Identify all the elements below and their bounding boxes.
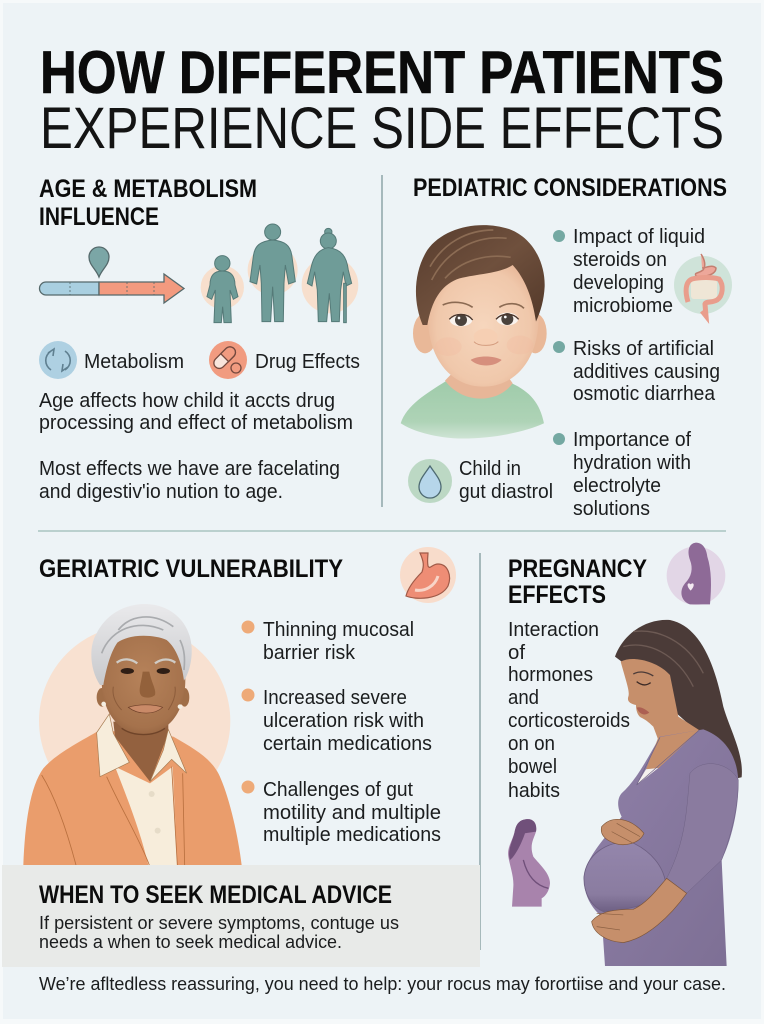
- text block: interaction of hormones: bowel: [508, 756, 557, 778]
- text block: interaction of hormones: corticosteroids: [508, 710, 630, 732]
- bullet list: pediatric: developing: [573, 272, 664, 294]
- icon: water drop: [408, 459, 452, 503]
- icon: metabolism cycle: [39, 341, 77, 379]
- bullet list: pediatric: hydration with: [573, 452, 691, 474]
- label: child in gut diastrol: gut diastrol: [459, 481, 553, 503]
- heading: pregnancy effects: EFFECTS: [508, 581, 606, 609]
- heading: age and metabolism: INFLUENCE: [39, 203, 159, 231]
- bullet list: geriatric: [242, 619, 441, 846]
- bullet list: pediatric: solutions: [573, 498, 650, 520]
- panel: geriatric vulnerability: [23, 547, 456, 865]
- icon: small pregnant silhouette: [508, 819, 550, 907]
- bullet list: pediatric: additives causing: [573, 361, 720, 383]
- text block: age affects: Age affects how child it accts drug: [39, 390, 335, 412]
- text block: most effects: and digestiv'io nution to age.: [39, 481, 283, 503]
- icon: digestive system: [674, 254, 732, 316]
- text block: interaction of hormones: of: [508, 642, 525, 664]
- text block: age affects: processing and effect of metabolism: [39, 412, 353, 434]
- text block: interaction of hormones: Interaction: [508, 619, 599, 641]
- panel: pregnancy effects: [508, 543, 742, 966]
- label: child in gut diastrol: [459, 458, 553, 503]
- icon: drug capsule: [209, 341, 247, 379]
- heading: pregnancy effects: [508, 555, 647, 609]
- title: [40, 39, 724, 161]
- bullet list: pediatric: Importance of: [573, 429, 691, 451]
- bullet list: pediatric: electrolyte: [573, 475, 661, 497]
- bullet list: geriatric: Challenges of gut: [263, 779, 413, 801]
- bullet list: pediatric: Risks of artificial: [573, 338, 714, 360]
- bullet list: geriatric: barrier risk: [263, 642, 356, 664]
- text block: interaction of hormones: habits: [508, 780, 560, 802]
- label: drug effects: Drug Effects: [255, 351, 360, 373]
- callout: when to seek medical advice: needs a when to seek medical advice.: [39, 931, 342, 952]
- bullet list: pediatric: microbiome: [573, 295, 673, 317]
- text block: most effects: [39, 458, 340, 503]
- illustration: child portrait: [401, 225, 547, 439]
- panel: age and metabolism: [39, 175, 360, 503]
- text block: age affects: [39, 390, 353, 434]
- bullet list: geriatric: Thinning mucosal: [263, 619, 414, 641]
- bullet list: geriatric: multiple medications: [263, 824, 441, 846]
- text block: interaction of hormones: [508, 619, 630, 802]
- illustration: pregnant woman: [584, 620, 742, 966]
- label: metabolism: Metabolism: [84, 351, 184, 373]
- text block: most effects: Most effects we have are facelating: [39, 458, 340, 480]
- heading: age and metabolism: AGE & METABOLISM: [39, 175, 257, 203]
- callout: when to seek medical advice: If persistent or severe symptoms, contuge us: [39, 912, 399, 933]
- age timeline arrow: [40, 247, 184, 303]
- bullet list: geriatric: certain medications: [263, 733, 432, 755]
- text block: interaction of hormones: and: [508, 687, 539, 709]
- bullet list: geriatric: ulceration risk with: [263, 710, 424, 732]
- bullet list: pediatric: [553, 226, 720, 520]
- icon: stomach: [400, 547, 456, 603]
- age figures: child, adult, older adult: [201, 224, 358, 323]
- footer text: We’re afltedless reassuring, you need to help: your rocus may forortiise and your case.: [39, 973, 726, 994]
- illustration: older woman portrait: [23, 604, 242, 865]
- text block: interaction of hormones: on on: [508, 733, 555, 755]
- callout: when to seek medical advice: [2, 865, 480, 967]
- callout: when to seek medical advice: WHEN TO SEEK MEDICAL ADVICE: [39, 881, 392, 909]
- bullet list: pediatric: steroids on: [573, 249, 667, 271]
- panel: pediatric considerations: [401, 174, 732, 520]
- bullet list: geriatric: motility and multiple: [263, 802, 441, 824]
- label: child in gut diastrol: Child in: [459, 458, 521, 480]
- bullet list: pediatric: osmotic diarrhea: [573, 383, 716, 405]
- text block: interaction of hormones: hormones: [508, 664, 593, 686]
- heading: pregnancy effects: PREGNANCY: [508, 555, 647, 583]
- heading: geriatric vulnerability: GERIATRIC VULNERABILITY: [39, 555, 343, 583]
- bullet list: geriatric: Increased severe: [263, 687, 407, 709]
- icon: pregnancy silhouette with heart: [667, 543, 725, 605]
- heading: age and metabolism: [39, 175, 257, 231]
- bullet list: pediatric: Impact of liquid: [573, 226, 705, 248]
